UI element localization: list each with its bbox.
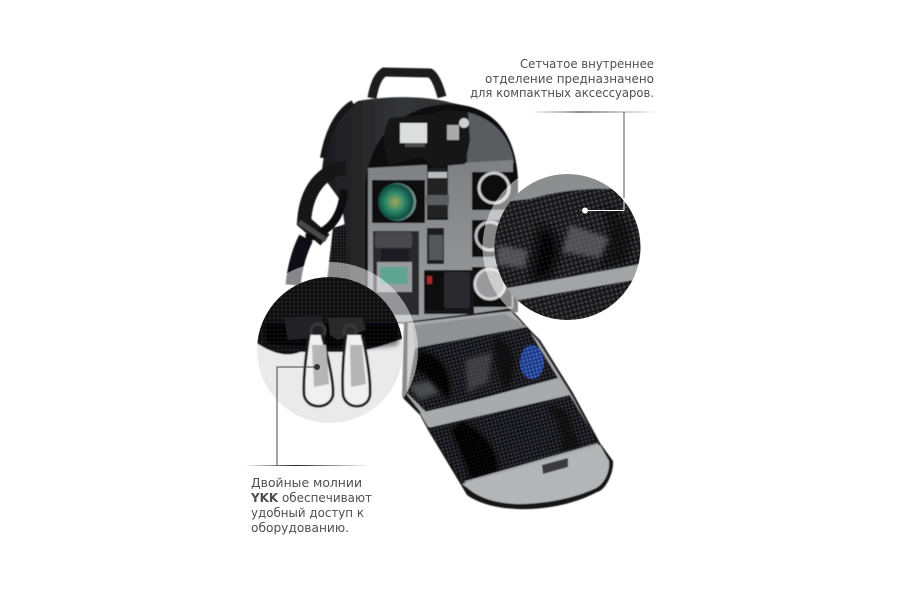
text: YKK zippers: Двойные молнии <box>251 475 362 490</box>
zipper slider left <box>284 316 326 340</box>
lens caps <box>475 173 509 299</box>
gray divider panel <box>368 160 513 322</box>
translucent ring <box>482 162 652 332</box>
mesh folds upper <box>415 350 450 400</box>
camera buttons <box>405 143 425 147</box>
callout circle: zippers <box>257 262 418 423</box>
zipper slider right <box>328 317 366 340</box>
lid top panel <box>412 314 527 348</box>
side mesh pocket <box>326 222 358 290</box>
gray strap <box>420 380 568 427</box>
zoomed mesh detail <box>494 174 640 320</box>
upper mesh pocket <box>406 326 558 412</box>
text: mesh compartment: для компактных аксессуаров. <box>470 85 654 100</box>
upper gray lining <box>467 112 514 165</box>
tag <box>542 458 568 474</box>
mesh folds lower <box>450 420 498 480</box>
white dot marker <box>582 208 588 214</box>
text: YKK zippers <box>250 475 372 535</box>
large lens <box>378 183 416 221</box>
callout line: zipper <box>245 364 370 466</box>
zipper pull right <box>343 335 370 406</box>
text: YKK zippers: оборудованию. <box>251 520 349 535</box>
zipper pull left <box>304 335 333 406</box>
vertical lens <box>426 168 449 260</box>
shoulder strap <box>293 168 346 285</box>
mesh highlights <box>562 225 610 258</box>
dark dot marker <box>314 364 320 370</box>
camera body <box>384 110 470 167</box>
text: mesh compartment <box>470 56 654 100</box>
lid outer shell <box>402 309 613 509</box>
blue object behind mesh <box>520 345 544 379</box>
text: YKK zippers: YKK обеспечивают <box>250 490 372 505</box>
camera top display <box>400 123 427 143</box>
shell mesh edge <box>323 103 353 158</box>
flash <box>375 232 412 292</box>
callout line: mesh <box>530 112 658 214</box>
translucent ring <box>242 262 418 438</box>
text: mesh compartment: Сетчатое внутреннее <box>520 56 654 71</box>
camera dial <box>459 118 469 128</box>
text: mesh compartment: отделение предназначено <box>485 71 654 86</box>
small camera <box>424 272 470 310</box>
compartments <box>372 160 514 315</box>
carry handle <box>372 72 442 98</box>
lower mesh pocket <box>429 394 598 482</box>
mesh highlights upper <box>465 352 492 392</box>
callout circle: mesh compartment <box>482 174 640 320</box>
infographic: camera backpack with callouts <box>247 59 655 534</box>
interior opening <box>365 104 518 324</box>
strap buckle <box>299 222 326 240</box>
text: YKK zippers: удобный доступ к <box>251 505 364 520</box>
backpack <box>293 72 613 509</box>
zipper seam shadow <box>262 322 400 349</box>
bottom pocket <box>462 445 609 504</box>
camera hot shoe <box>447 125 459 140</box>
zoomed zipper detail <box>255 275 405 425</box>
lid lining <box>407 311 609 504</box>
backpack body shell <box>322 97 518 330</box>
mesh folds <box>530 225 559 282</box>
